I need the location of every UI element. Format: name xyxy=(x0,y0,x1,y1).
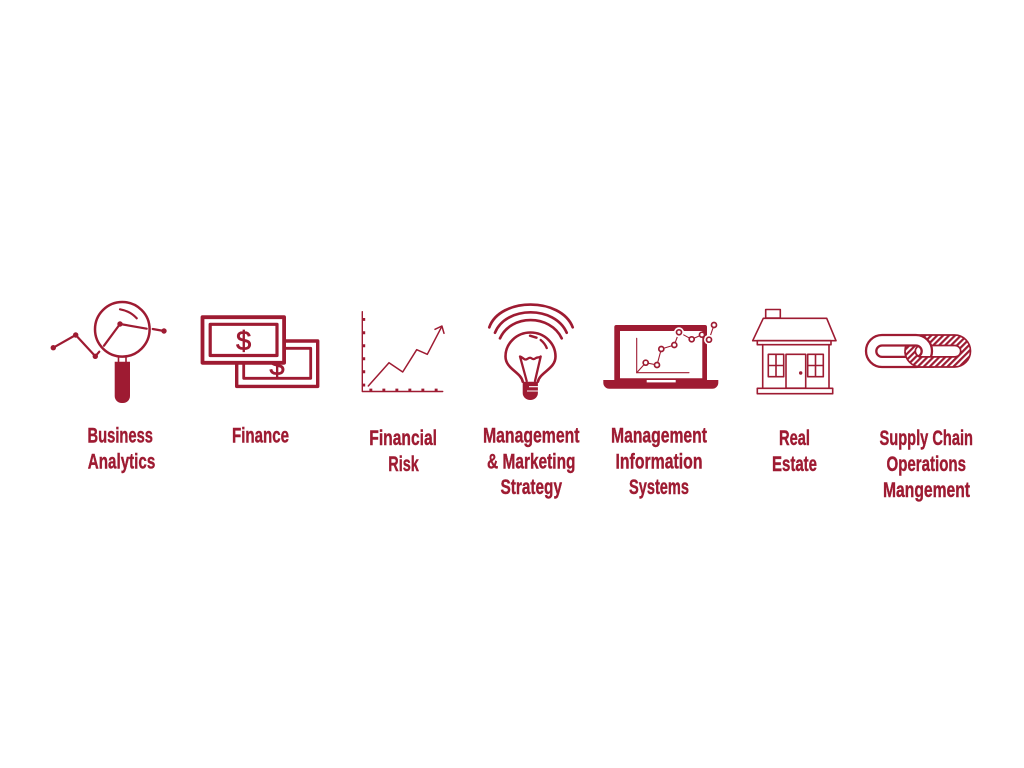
label: Real Estate xyxy=(772,426,817,476)
label: Management & Marketing Strategy: & Marketing xyxy=(487,450,576,474)
right hatched link xyxy=(905,335,970,367)
interlocking hatched overlap xyxy=(904,352,934,368)
label: Management & Marketing Strategy: Strategy xyxy=(500,475,562,499)
icon: laptop with line graph xyxy=(603,322,718,389)
column: Real Estate xyxy=(753,310,836,476)
label: Management Information Systems: Information xyxy=(616,450,702,474)
label: Financial Risk: Financial xyxy=(369,426,437,450)
label: Management Information Systems: Management xyxy=(611,424,707,448)
label: Financial Risk: Risk xyxy=(388,452,419,476)
icon: light bulb with signal arcs xyxy=(489,305,573,400)
column: Management & Marketing Strategy xyxy=(483,305,580,499)
label: Management & Marketing Strategy xyxy=(483,424,580,499)
icon: rising line chart with arrow xyxy=(362,312,444,392)
label: Supply Chain Operations Mangement: Supply Chain xyxy=(880,426,973,450)
icon: house xyxy=(753,310,836,394)
column: Supply Chain Operations Management xyxy=(866,335,973,502)
column: Management Information Systems xyxy=(603,322,718,499)
icon: magnifying glass over line chart xyxy=(51,302,167,403)
label: Business Analytics xyxy=(88,424,155,474)
icon: two dollar bills xyxy=(202,317,318,386)
icon: chain links xyxy=(866,335,970,367)
label: Business Analytics: Business xyxy=(88,424,153,448)
icon: two dollar bills: $ xyxy=(236,326,251,356)
label: Management Information Systems xyxy=(611,424,707,499)
left white link xyxy=(866,335,932,367)
label: Management Information Systems: Systems xyxy=(629,475,689,499)
label: Supply Chain Operations Mangement: Mangement xyxy=(883,478,970,502)
label: Supply Chain Operations Mangement: Operations xyxy=(886,452,966,476)
label: Business Analytics: Analytics xyxy=(88,450,155,474)
column: Business Analytics xyxy=(51,302,167,474)
label: Management & Marketing Strategy: Management xyxy=(483,424,580,448)
label: Finance: Finance xyxy=(232,424,289,448)
column: Finance xyxy=(202,317,318,448)
label: Real Estate: Estate xyxy=(772,452,817,476)
column: Financial Risk xyxy=(362,312,444,476)
label: Financial Risk xyxy=(369,426,437,476)
label: Supply Chain Operations Mangement xyxy=(880,426,973,502)
label: Real Estate: Real xyxy=(779,426,810,450)
icon: two dollar bills: $ xyxy=(269,351,285,381)
